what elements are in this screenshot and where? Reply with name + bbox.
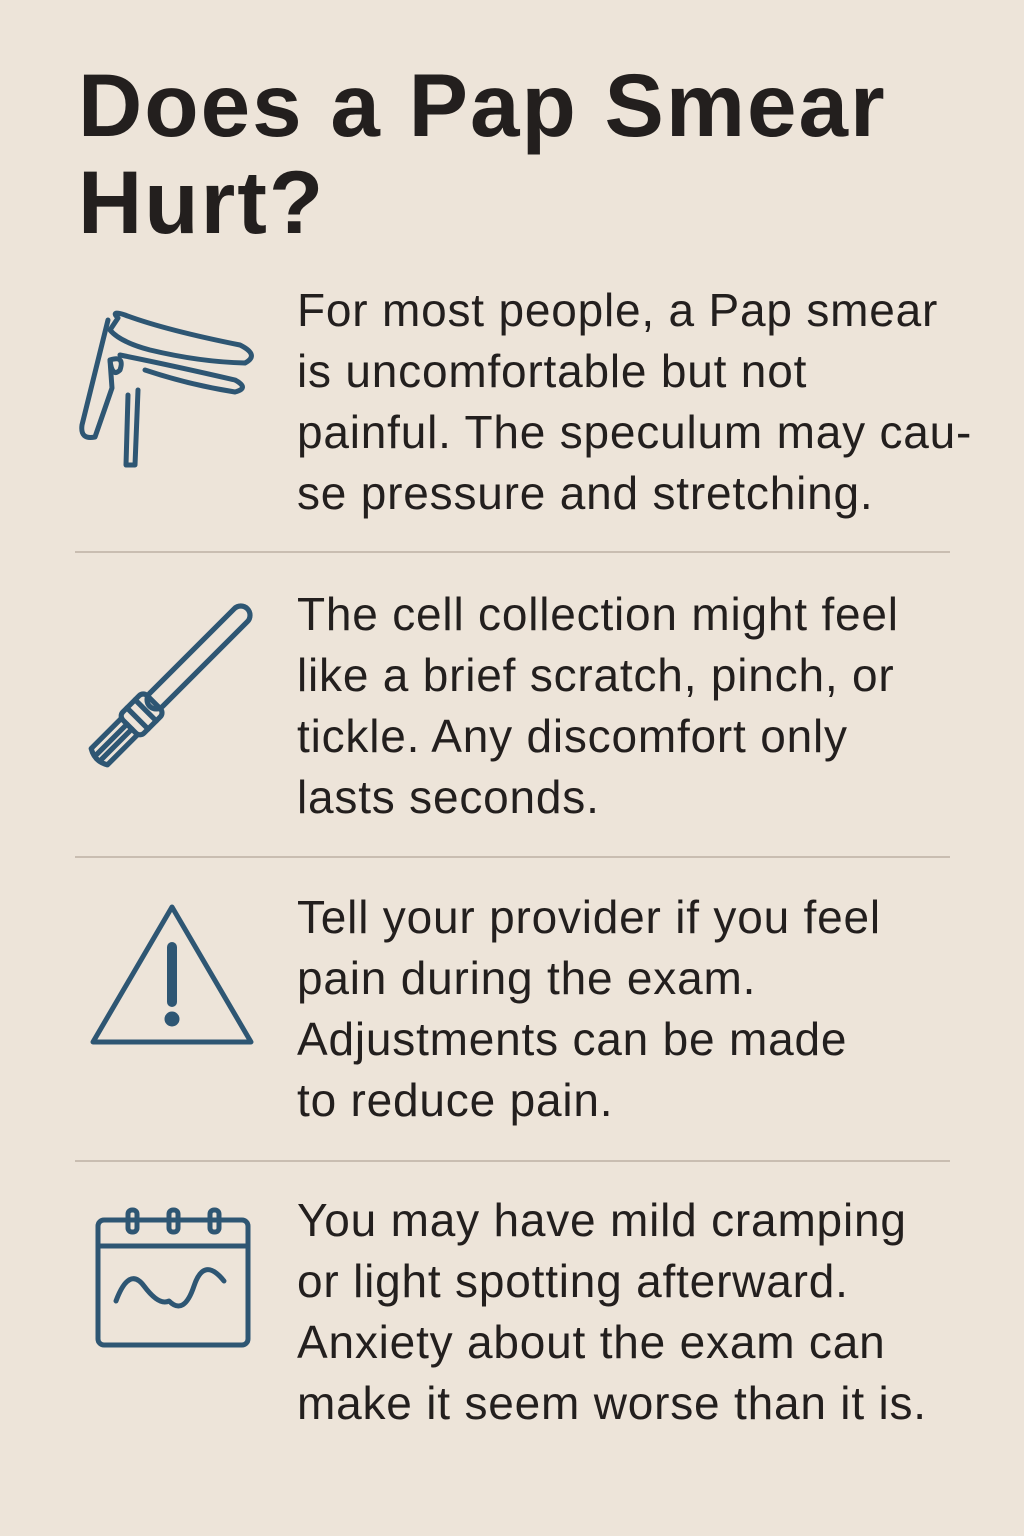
text: section 4: You may have mild cramping	[297, 1194, 907, 1246]
text: section 1: For most people, a Pap smear	[297, 284, 938, 336]
icon: brush	[88, 603, 253, 768]
icon: warning	[90, 904, 254, 1044]
text: section 3: Tell your provider if you feel	[297, 891, 881, 943]
icon: calendar	[96, 1208, 250, 1348]
text: section 2: lasts seconds.	[297, 771, 600, 823]
text: section 2: The cell collection might feel	[297, 588, 899, 640]
icon: speculum	[79, 310, 254, 468]
text: section 1: painful. The speculum may cau-	[297, 406, 972, 458]
text: section 3: Adjustments can be made	[297, 1013, 847, 1065]
text: section 4: make it seem worse than it is.	[297, 1377, 927, 1429]
text: section 2: tickle. Any discomfort only	[297, 710, 848, 762]
text: section 3: to reduce pain.	[297, 1074, 613, 1126]
text: section 3: pain during the exam.	[297, 952, 756, 1004]
text: section 2	[297, 588, 899, 823]
text: section 3	[297, 891, 881, 1126]
text: section 1	[297, 284, 972, 519]
text: section 4	[297, 1194, 927, 1429]
text: section 1: is uncomfortable but not	[297, 345, 807, 397]
text: section 4: Anxiety about the exam can	[297, 1316, 885, 1368]
text: section 4: or light spotting afterward.	[297, 1255, 849, 1307]
title	[78, 55, 887, 252]
title: Hurt?	[78, 152, 325, 252]
text: section 2: like a brief scratch, pinch, or	[297, 649, 894, 701]
title: Does a Pap Smear	[78, 55, 887, 155]
text: section 1: se pressure and stretching.	[297, 467, 873, 519]
